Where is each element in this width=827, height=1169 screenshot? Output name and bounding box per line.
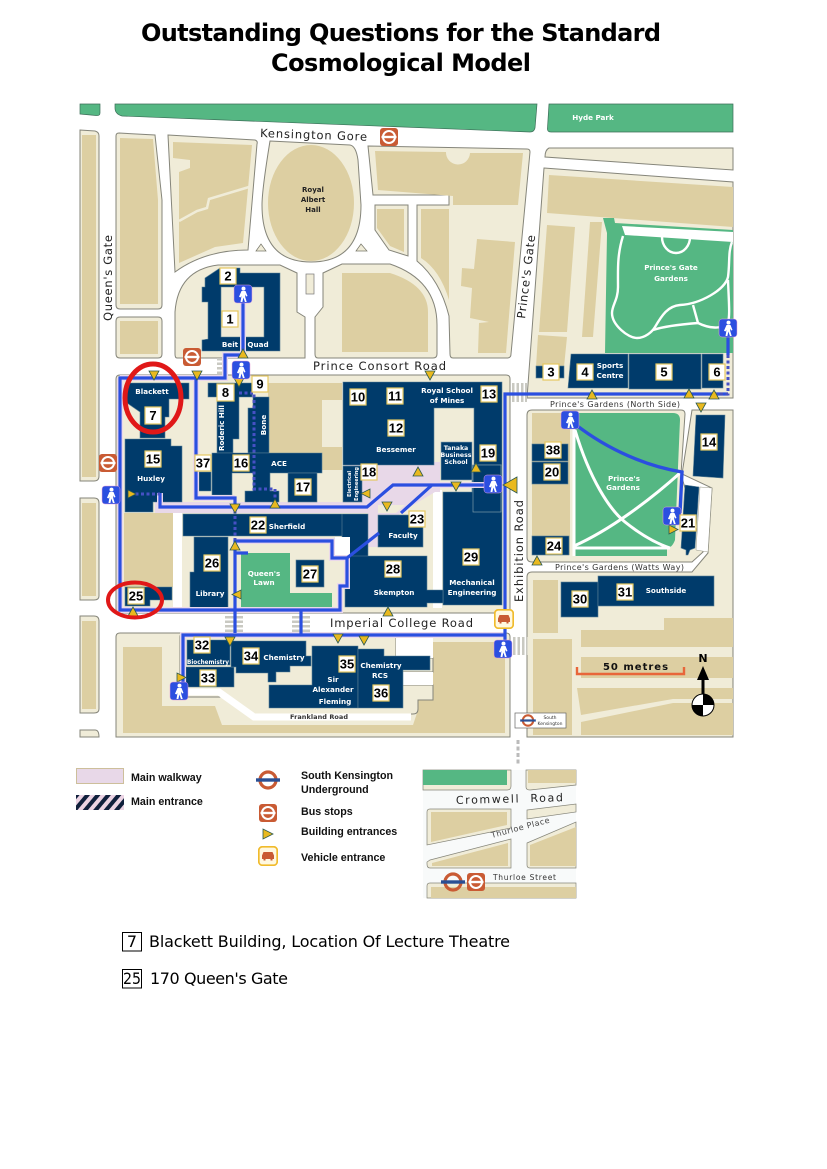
sir alexander fleming: Fleming (319, 697, 351, 706)
chemistry rcs: Chemistry (360, 661, 402, 670)
legend: main entrance (76, 795, 203, 810)
numbered badges: 26 (205, 556, 219, 570)
numbered badges: 23 (410, 512, 424, 526)
royal albert hall: Albert (301, 196, 326, 204)
royal albert hall: Hall (305, 206, 321, 214)
numbered badges: 5 (660, 364, 668, 380)
key item 7: 7 (127, 932, 137, 951)
library (190, 537, 228, 608)
prince's gate gardens block: Prince's Gate (644, 263, 698, 272)
beit quad building (202, 268, 280, 351)
walking routes (120, 294, 728, 685)
inset map: Thurloe Place (489, 816, 551, 840)
numbered badges: 34 (244, 648, 259, 664)
bessemer and royal school of mines: Royal School (421, 386, 473, 395)
numbered badges (128, 268, 725, 701)
vehicle entrance icon (495, 610, 513, 628)
numbered badges: 31 (618, 584, 632, 600)
hyde park green strips (80, 104, 733, 132)
numbered badges: 22 (251, 518, 265, 532)
sherfield (183, 514, 368, 557)
pedestrian crossings (217, 358, 528, 655)
building 37 wing (199, 472, 211, 491)
tanaka business school: School (444, 459, 468, 466)
key item 25: 25 (123, 969, 141, 988)
biochemistry (186, 640, 234, 687)
title: Cosmological Model (271, 49, 531, 77)
beit quad land (175, 264, 437, 358)
numbered badges: 11 (388, 388, 402, 404)
legend: bus stops: Bus stops (301, 806, 353, 818)
north-east blocks (368, 146, 530, 358)
numbered badges: 1 (226, 312, 234, 326)
road labels: Queen's Gate (101, 235, 115, 321)
bessemer and royal school of mines: of Mines (430, 396, 464, 405)
biochemistry: Biochemistry (187, 659, 229, 666)
numbered badges: 3 (547, 364, 555, 380)
red ellipse around Blackett (125, 364, 181, 432)
numbered badges: 24 (547, 538, 562, 554)
main campus land (116, 375, 510, 613)
numbered badges: 8 (222, 385, 229, 400)
roderic hill: Roderic Hill (217, 405, 226, 451)
legend: main entrance: Main entrance (131, 796, 203, 808)
bone: Bone (259, 415, 268, 435)
sir alexander fleming: Sir (327, 675, 339, 684)
numbered badges: 12 (389, 420, 403, 436)
road labels: Prince's Gardens (Watts Way) (555, 563, 684, 572)
faculty (378, 515, 423, 547)
numbered badges: 7 (149, 408, 157, 423)
numbered badges: 30 (573, 592, 587, 606)
huxley building: Huxley (137, 474, 165, 483)
building 25 (125, 587, 172, 606)
inset map (423, 770, 576, 898)
huxley building (125, 439, 182, 512)
numbered badges: 17 (296, 480, 310, 494)
numbered badges: 29 (464, 550, 478, 564)
numbered badges: 9 (256, 376, 264, 392)
numbered badges: 15 (146, 452, 160, 466)
skempton (345, 556, 443, 607)
royal albert hall (256, 141, 367, 262)
numbered badges: 33 (201, 670, 215, 686)
numbered badges: 18 (362, 464, 376, 480)
sports centre, buildings 3-6: Sports (597, 361, 623, 370)
entrance markers (128, 349, 719, 682)
bone (248, 397, 269, 453)
road labels: Exhibition Road (512, 500, 526, 602)
south kensington sign: Kensington (537, 721, 563, 727)
north compass (692, 652, 714, 716)
beit quad building: Beit (222, 340, 239, 349)
main walkway band (155, 462, 440, 547)
legend: vehicle entrance (259, 847, 385, 865)
legend: underground: Underground (301, 784, 369, 796)
road labels: Prince's Gardens (North Side) (550, 400, 680, 409)
inset map: Thurloe Street (492, 873, 556, 882)
legend: bus stops (259, 804, 353, 822)
legend: underground (256, 770, 393, 796)
royal albert hall: Royal (302, 186, 324, 194)
blackett building (127, 383, 189, 438)
numbered badges: 14 (702, 434, 717, 450)
prince's gardens buildings (532, 415, 725, 555)
numbered badges: 28 (386, 562, 400, 576)
numbered badges: 4 (581, 364, 589, 380)
numbered badges: 27 (303, 566, 317, 582)
main entrance marker (503, 477, 517, 493)
road labels: Imperial College Road (330, 616, 473, 630)
numbered badges: 36 (374, 686, 388, 700)
sir alexander fleming: Alexander (312, 685, 354, 694)
beit quad building: Quad (247, 340, 269, 349)
blackett building: Blackett (135, 387, 169, 396)
queen's lawn: Queen's (248, 569, 280, 578)
prince's gardens (527, 410, 733, 737)
title: Outstanding Questions for the Standard (141, 19, 661, 47)
key item 7: Blackett Building, Location Of Lecture Theatre (149, 932, 510, 951)
queen's lawn: Lawn (253, 578, 275, 587)
building 17 (288, 473, 317, 502)
buildings (125, 268, 725, 708)
mechanical engineering: Mechanical (449, 578, 495, 587)
numbered badges: 35 (340, 656, 354, 672)
south-east blocks (533, 580, 733, 735)
ace: ACE (271, 459, 287, 468)
roderic hill (208, 383, 252, 453)
numbered badges: 2 (224, 268, 232, 284)
inset map: Cromwell Road (456, 791, 563, 807)
sports centre, buildings 3-6 (536, 354, 723, 389)
south kensington sign: South (543, 715, 557, 721)
southside (561, 576, 714, 617)
numbered badges: 16 (234, 456, 248, 470)
bus stops (99, 128, 398, 472)
road labels (101, 126, 684, 721)
prince's gate gardens block (527, 148, 733, 398)
tanaka business school: Business (441, 452, 472, 459)
road labels: Prince Consort Road (313, 359, 446, 373)
red ellipse around building 25 (108, 582, 162, 618)
legend: main walkway (76, 768, 202, 784)
building 27 (296, 560, 324, 587)
legend: vehicle entrance: Vehicle entrance (301, 852, 385, 864)
queen's lawn (235, 542, 335, 608)
chemistry rcs: RCS (372, 671, 388, 680)
legend: building entrances (263, 826, 397, 839)
skempton: Skempton (374, 588, 414, 597)
south campus land (116, 633, 510, 737)
tanaka business school: Tanaka (444, 445, 468, 452)
west strip blocks (80, 130, 99, 737)
chemistry (231, 641, 311, 682)
legend: building entrances: Building entrances (301, 826, 397, 838)
numbered badges: 21 (681, 516, 695, 530)
numbered badges: 19 (481, 446, 495, 460)
dotted route to station (516, 740, 520, 766)
prince's gate gardens block: Gardens (654, 274, 688, 283)
title (141, 19, 661, 77)
scale bar (577, 662, 684, 674)
sports centre, buildings 3-6: Centre (596, 371, 624, 380)
sherfield: Sherfield (269, 522, 305, 531)
numbered badges: 13 (482, 386, 496, 402)
mechanical engineering: Engineering (448, 588, 496, 597)
campus map (80, 104, 737, 737)
tanaka business school (441, 442, 472, 480)
pedestrian icons (102, 285, 737, 700)
faculty: Faculty (388, 531, 418, 540)
prince's gardens: Prince's (608, 474, 640, 483)
electrical engineering (343, 466, 362, 502)
road labels: Prince's Gate (514, 234, 538, 319)
prince's gardens: Gardens (606, 483, 640, 492)
numbered badges: 37 (196, 456, 210, 470)
legend: main walkway: Main walkway (131, 772, 202, 784)
hyde park green strips: Hyde Park (572, 113, 614, 122)
numbered badges: 10 (351, 390, 365, 404)
north compass: N (698, 652, 708, 665)
southside: Southside (646, 586, 686, 595)
bessemer and royal school of mines: Bessemer (376, 445, 416, 454)
north blocks (116, 133, 257, 358)
legend: underground: South Kensington (301, 770, 393, 782)
bessemer and royal school of mines (343, 382, 502, 465)
numbered badges: 25 (129, 588, 143, 604)
mechanical engineering (443, 465, 502, 605)
road labels: Frankland Road (290, 713, 348, 721)
road labels: Kensington Gore (260, 126, 367, 144)
ace (212, 453, 322, 502)
numbered badges: 20 (545, 464, 559, 480)
south kensington sign (515, 713, 566, 728)
library: Library (196, 589, 225, 598)
numbered badges: 38 (546, 442, 560, 458)
chemistry rcs (358, 649, 430, 708)
electrical engineering: Engineering (354, 467, 360, 501)
numbered badges: 6 (713, 364, 721, 380)
sir alexander fleming (269, 646, 358, 708)
scale bar: 50 metres (603, 662, 669, 673)
numbered badges: 32 (195, 638, 209, 652)
electrical engineering: Electrical (347, 471, 353, 497)
key item 25: 170 Queen's Gate (150, 969, 288, 988)
chemistry: Chemistry (263, 653, 305, 662)
